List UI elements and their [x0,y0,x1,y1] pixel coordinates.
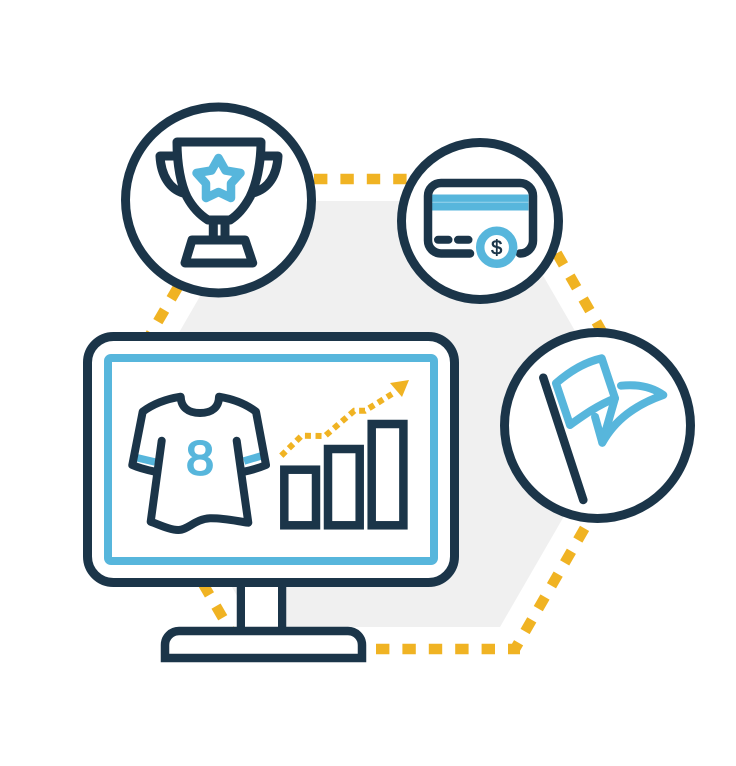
bar chart [284,424,403,525]
card stripe [432,194,528,210]
monitor base [165,631,362,658]
icon: flag badge [504,332,690,518]
trophy cup [160,142,278,263]
icon: trophy badge [126,107,312,293]
jersey number: 8 [186,432,214,485]
grey hexagon background [132,201,623,627]
jersey outline [132,397,266,530]
monitor [88,336,454,582]
dotted growth arrow [281,380,409,456]
dotted gold hexagon outline [104,179,650,649]
jersey sleeve stripes [136,456,261,462]
monitor screen [108,358,434,561]
icon: jersey [132,397,266,530]
card chip dashes [438,236,468,244]
monitor stand neck fill [245,587,278,627]
trophy star [196,158,240,198]
icon: credit card badge [402,142,558,300]
flag cloth [556,358,663,443]
monitor stand [241,583,282,631]
flag pole [543,378,583,500]
dollar coin [480,231,513,264]
dollar coin: $ [491,238,502,260]
card outline [428,183,533,254]
